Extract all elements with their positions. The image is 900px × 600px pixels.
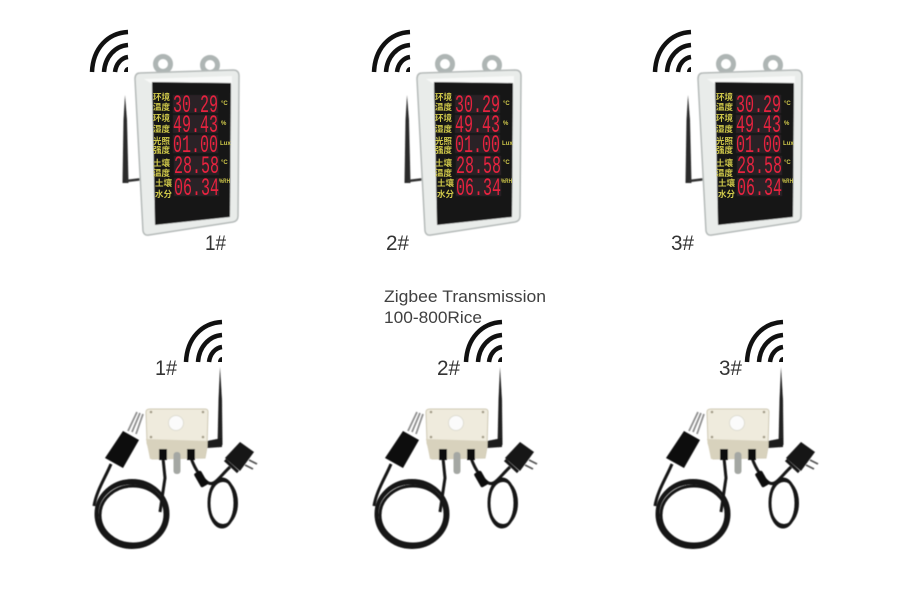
- environment readings: 土壤: [437, 178, 455, 188]
- environment readings: %: [784, 121, 790, 127]
- environment readings: %RH: [501, 179, 512, 185]
- environment readings: [435, 91, 513, 203]
- environment readings: 水分: [718, 189, 736, 199]
- environment readings: %: [221, 121, 227, 127]
- environment readings: 01.00: [736, 131, 781, 160]
- label: 2#: 2#: [386, 232, 409, 255]
- environment readings: 温度: [435, 102, 453, 112]
- environment readings: 强度: [435, 145, 453, 155]
- environment readings: 环境: [435, 113, 453, 123]
- label: 1#: 1#: [155, 357, 177, 380]
- environment readings: 49.43: [455, 111, 500, 140]
- environment readings: %: [503, 121, 509, 127]
- environment readings: 土壤: [155, 178, 173, 188]
- label: 2#: 2#: [437, 357, 460, 380]
- environment readings: Lux: [783, 141, 794, 147]
- environment readings: 温度: [153, 168, 171, 178]
- environment readings: 湿度: [153, 124, 171, 134]
- caption: Zigbee transmission range: Zigbee Transmission: [384, 288, 546, 306]
- icon: wifi signal: [186, 322, 222, 362]
- environment readings: Lux: [502, 141, 513, 147]
- environment readings: 06.34: [174, 174, 219, 203]
- sensor unit 3#: [655, 322, 818, 548]
- environment readings: %RH: [219, 179, 230, 185]
- icon: wifi signal: [92, 32, 128, 72]
- icon: wifi signal: [747, 322, 783, 362]
- label: 3#: 3#: [671, 232, 694, 255]
- environment readings: 30.29: [455, 91, 500, 120]
- LED display board: [404, 56, 521, 235]
- environment readings: 光照: [716, 136, 734, 146]
- environment readings: °C: [221, 160, 228, 166]
- environment readings: °C: [784, 160, 791, 166]
- sensor unit 1#: [94, 322, 257, 548]
- environment readings: 光照: [153, 136, 171, 146]
- environment readings: 30.29: [736, 91, 781, 120]
- environment readings: 土壤: [718, 178, 736, 188]
- sensor unit 2#: [374, 322, 537, 548]
- icon: wifi signal: [466, 322, 502, 362]
- environment readings: 水分: [155, 189, 173, 199]
- environment readings: 温度: [153, 102, 171, 112]
- environment readings: 环境: [153, 92, 171, 102]
- environment readings: 土壤: [435, 158, 453, 168]
- environment readings: 水分: [437, 189, 455, 199]
- label: 3#: 3#: [719, 357, 742, 380]
- environment readings: 温度: [716, 102, 734, 112]
- environment readings: 环境: [716, 92, 734, 102]
- environment readings: 49.43: [173, 111, 218, 140]
- icon: wifi signal: [374, 32, 410, 72]
- sensor box with probe and cables: [655, 367, 818, 548]
- environment readings: 环境: [435, 92, 453, 102]
- environment readings: 环境: [716, 113, 734, 123]
- icon: wifi signal: [655, 32, 691, 72]
- environment readings: 强度: [153, 145, 171, 155]
- sensor box with probe and cables: [94, 367, 257, 548]
- environment readings: 49.43: [736, 111, 781, 140]
- environment readings: %RH: [782, 179, 793, 185]
- environment readings: °C: [503, 160, 510, 166]
- environment readings: 28.58: [456, 152, 501, 181]
- environment readings: °C: [784, 101, 791, 107]
- environment readings: 01.00: [455, 131, 500, 160]
- environment readings: 28.58: [174, 152, 219, 181]
- environment readings: 强度: [716, 145, 734, 155]
- environment readings: 温度: [716, 168, 734, 178]
- environment readings: 温度: [435, 168, 453, 178]
- environment readings: 光照: [435, 136, 453, 146]
- environment readings: °C: [503, 101, 510, 107]
- environment readings: [716, 91, 794, 203]
- environment readings: 土壤: [153, 158, 171, 168]
- label: 1#: 1#: [205, 232, 226, 255]
- environment readings: 30.29: [173, 91, 218, 120]
- LED display board: [686, 56, 802, 235]
- display unit 1#: [92, 32, 239, 255]
- sensor box with probe and cables: [374, 367, 537, 548]
- environment readings: 环境: [153, 113, 171, 123]
- LED display board: [122, 56, 239, 235]
- environment readings: Lux: [220, 141, 231, 147]
- environment readings: 01.00: [173, 131, 218, 160]
- display unit 3#: [655, 32, 802, 255]
- environment readings: 湿度: [435, 124, 453, 134]
- environment readings: °C: [221, 101, 228, 107]
- display unit 2#: [374, 32, 521, 255]
- environment readings: 06.34: [456, 174, 501, 203]
- environment readings: 土壤: [716, 158, 734, 168]
- caption: Zigbee transmission range: [384, 288, 546, 327]
- environment readings: 28.58: [737, 152, 782, 181]
- environment readings: 湿度: [716, 124, 734, 134]
- environment readings: 06.34: [737, 174, 782, 203]
- caption: Zigbee transmission range: 100-800Rice: [384, 309, 482, 327]
- environment readings: [153, 91, 231, 203]
